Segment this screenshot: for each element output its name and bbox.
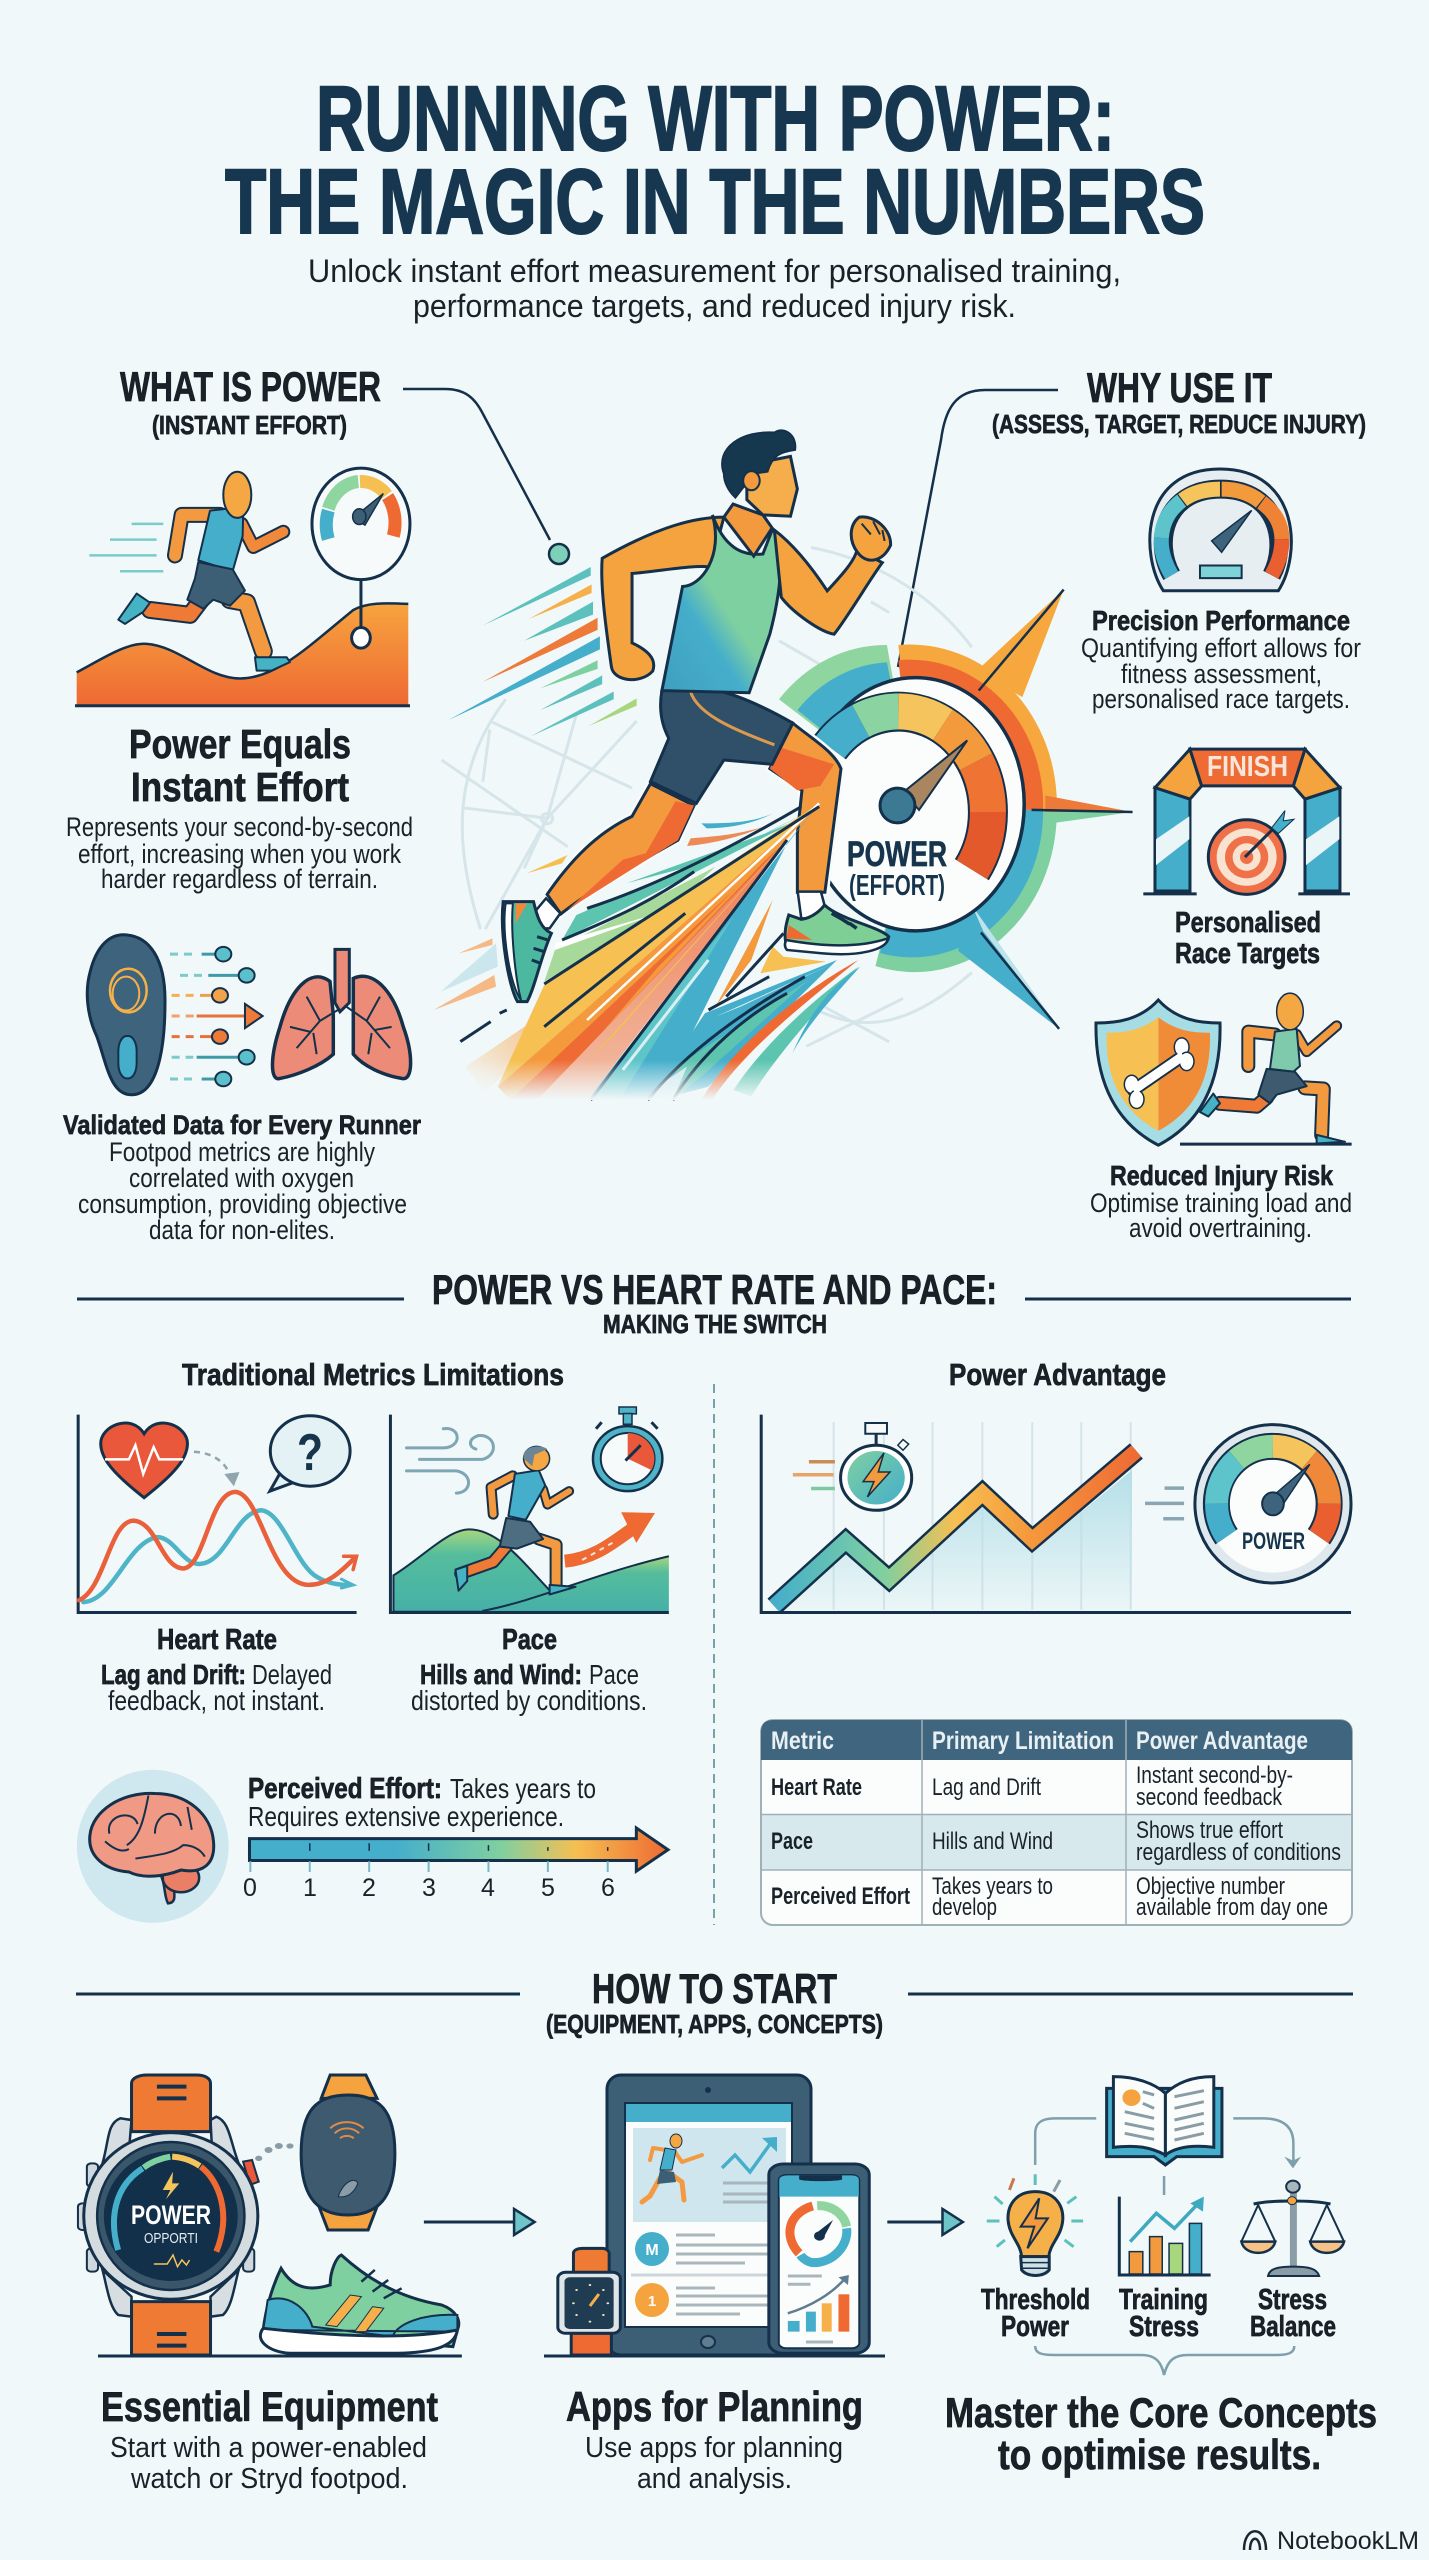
row: pace: regardless of conditions	[1136, 1839, 1341, 1866]
right column: precision gauge	[1150, 469, 1291, 591]
heading: what is power: WHAT IS POWER	[120, 363, 381, 410]
gauge dial	[807, 678, 1024, 931]
text block: precision performance: Quantifying effort allows for	[1081, 633, 1361, 663]
text: heart rate: Delayed	[252, 1659, 332, 1690]
text: perceived effort: Perceived Effort:	[248, 1773, 442, 1805]
row: pace: Shows true effort	[1136, 1817, 1283, 1844]
icon: book	[1107, 2077, 1222, 2165]
text: personalised race targets: Race Targets	[1175, 938, 1320, 970]
rear shoe	[502, 898, 560, 1002]
heading: what is power: (INSTANT EFFORT)	[152, 410, 347, 440]
question mark: ?	[297, 1424, 323, 1482]
arrow: apps to concepts	[887, 2209, 963, 2235]
wind	[406, 1429, 493, 1493]
lines	[79, 1492, 357, 1602]
illustration: footpod to lungs	[87, 935, 411, 1095]
text block: validated data: consumption, providing objective	[78, 1189, 407, 1219]
brace	[1035, 2346, 1294, 2375]
connectors	[1035, 2118, 1293, 2195]
text block: power equals instant effort: Represents your second-by-second	[66, 812, 413, 842]
concept labels: Power	[1001, 2311, 1069, 2343]
text block: reduced injury risk: Reduced Injury Risk	[1110, 1160, 1333, 1191]
column heading: traditional metrics: Traditional Metrics Limitations	[182, 1357, 564, 1392]
concept labels: Threshold	[981, 2284, 1090, 2316]
runner: front arm	[774, 517, 891, 634]
section heading: how to start: (EQUIPMENT, APPS, CONCEPTS)	[546, 2009, 883, 2039]
chart: power advantage	[761, 1415, 1351, 1612]
leader line: why use it	[898, 390, 1058, 667]
scale arrow 0-6: 6	[601, 1874, 615, 1902]
illustration: core concepts	[987, 2077, 1344, 2375]
background web	[441, 547, 972, 1046]
text block: apps for planning: and analysis.	[637, 2463, 792, 2495]
scale arrow 0-6: 2	[362, 1874, 376, 1902]
concept labels: Training	[1119, 2284, 1208, 2316]
text: pace: Pace	[589, 1659, 639, 1690]
scale arrow 0-6: 1	[303, 1874, 317, 1902]
row: perceived effort: Takes years to	[932, 1873, 1053, 1900]
dashed arrow	[194, 1452, 240, 1486]
text: perceived effort: Requires extensive experience.	[248, 1801, 564, 1832]
list lines	[631, 2183, 785, 2314]
text: heart rate: Heart Rate	[157, 1624, 277, 1656]
text: pace: Hills and Wind:	[420, 1659, 582, 1690]
speed lines	[89, 524, 163, 571]
title: RUNNING WITH POWER:	[316, 68, 1115, 170]
phone bars	[788, 2294, 849, 2332]
logo: NotebookLM: NotebookLM	[1277, 2527, 1419, 2555]
text block: precision performance: personalised race targets.	[1092, 684, 1350, 714]
section heading: power vs heart rate and pace	[77, 1266, 1351, 1339]
section heading: power vs heart rate and pace: MAKING THE SWITCH	[603, 1309, 827, 1339]
comparison table	[761, 1720, 1352, 1925]
icon: stopwatch	[593, 1407, 662, 1491]
text block: power equals instant effort	[66, 721, 413, 894]
scale arrow 0-6: 3	[422, 1874, 436, 1902]
gauge label: POWER	[847, 835, 947, 874]
row: perceived effort: Perceived Effort	[771, 1883, 910, 1910]
text block: validated data: data for non-elites.	[149, 1215, 335, 1245]
scale arrow 0-6: 0	[243, 1874, 257, 1902]
concept labels: Stress	[1258, 2284, 1327, 2316]
table header	[761, 1720, 1352, 1760]
section heading: how to start	[76, 1965, 1353, 2039]
text: pace: distorted by conditions.	[411, 1685, 647, 1716]
chart: heart rate lag	[78, 1415, 357, 1612]
icon: training stress chart	[1119, 2197, 1211, 2275]
row: pace: Pace	[771, 1828, 813, 1855]
row: heart rate: Lag and Drift	[932, 1774, 1041, 1801]
faint streaks and dashes	[434, 855, 567, 1093]
upper slivers	[544, 807, 805, 982]
runner: back arm	[602, 517, 724, 680]
row: pace	[771, 1817, 1341, 1866]
illustration: essential equipment	[78, 2075, 535, 2356]
lungs	[272, 949, 411, 1079]
icon: stopwatch	[793, 1423, 912, 1510]
text: perceived effort	[248, 1773, 596, 1832]
app icons text: 1	[648, 2293, 656, 2310]
column heading: power advantage: Power Advantage	[949, 1357, 1166, 1392]
text block: master the core concepts: to optimise results.	[998, 2431, 1321, 2478]
text block: reduced injury risk: avoid overtraining.	[1129, 1213, 1312, 1243]
text block: power equals instant effort: Power Equals	[129, 721, 351, 767]
table frame	[761, 1720, 1352, 1925]
runner: head	[722, 430, 797, 556]
app runner	[642, 2134, 702, 2202]
footpod	[301, 2075, 395, 2230]
arch label: FINISH	[1207, 751, 1288, 783]
main fan	[498, 803, 819, 1100]
title	[225, 68, 1205, 253]
text block: apps for planning: Use apps for planning	[585, 2432, 843, 2464]
icon: balance scale	[1241, 2181, 1344, 2276]
heading: what is power	[120, 363, 381, 440]
second fan	[648, 873, 860, 1100]
shaded row	[762, 1815, 1351, 1870]
icon: speech bubble	[270, 1416, 350, 1491]
subtitle	[308, 253, 1121, 324]
burst fade	[430, 1060, 950, 1100]
illustration: runner on terrain with gauge	[75, 468, 410, 706]
runner: front leg	[770, 723, 841, 892]
energy burst, lower legs and shoes	[434, 803, 889, 1100]
hill	[77, 603, 408, 705]
gauge colour ring	[779, 645, 1057, 972]
shield	[1096, 1000, 1220, 1145]
icon: finish arch with target	[1143, 749, 1350, 894]
text block: power equals instant effort: harder regardless of terrain.	[101, 864, 378, 894]
watch	[78, 2075, 259, 2355]
gauge label power: POWER	[1242, 1528, 1305, 1555]
runner: rear leg	[547, 784, 694, 914]
runner	[118, 472, 290, 671]
header labels: Metric	[771, 1727, 834, 1755]
gauge spikes	[958, 590, 1133, 1029]
text block: power equals instant effort: effort, increasing when you work	[78, 839, 401, 869]
app icons text	[645, 2242, 659, 2310]
illustration: apps tablet	[544, 2075, 885, 2356]
text block: essential equipment: Start with a power-enabled	[110, 2432, 427, 2464]
text: heart rate	[101, 1624, 332, 1716]
row: heart rate	[771, 1762, 1293, 1811]
runner: shorts	[650, 686, 793, 803]
text: personalised race targets	[1175, 907, 1321, 970]
text: pace	[411, 1624, 647, 1716]
row: heart rate: Instant second-by-	[1136, 1762, 1293, 1789]
insole	[87, 935, 165, 1095]
row: heart rate: Heart Rate	[771, 1774, 862, 1801]
scale arrow 0-6: 5	[541, 1874, 555, 1902]
dots	[255, 2143, 294, 2161]
text block: apps for planning: Apps for Planning	[566, 2383, 863, 2430]
text block: validated data: correlated with oxygen	[129, 1163, 354, 1193]
subtitle: Unlock instant effort measurement for personalised training,	[308, 253, 1121, 289]
text block: validated data: Validated Data for Every Runner	[63, 1110, 421, 1140]
chart: pace with hills and wind	[390, 1407, 669, 1612]
heading: why use it	[992, 364, 1366, 439]
heading: why use it: WHY USE IT	[1087, 364, 1272, 411]
text: pace: Pace	[502, 1624, 557, 1656]
header labels	[771, 1727, 1308, 1755]
text: perceived effort: Takes years to	[450, 1773, 596, 1804]
central illustration: runner with power gauge	[430, 430, 1133, 1100]
section heading: how to start: HOW TO START	[592, 1965, 837, 2012]
front shoe	[785, 892, 889, 954]
icon: light bulb	[987, 2174, 1083, 2275]
icon: shield with bone and runner	[1096, 993, 1352, 1145]
lugs	[102, 2117, 239, 2317]
text block: validated data: Footpod metrics are highly	[109, 1137, 375, 1167]
runner	[455, 1446, 576, 1594]
text: heart rate: feedback, not instant.	[108, 1685, 325, 1716]
row: perceived effort: available from day one	[1136, 1894, 1328, 1921]
gauge label: (EFFORT)	[849, 870, 945, 902]
text block: master the core concepts	[945, 2389, 1377, 2478]
app chart arrow	[722, 2140, 773, 2172]
phone dial	[790, 2206, 847, 2263]
leader line: what is power	[403, 389, 569, 564]
text block: reduced injury risk	[1090, 1160, 1352, 1243]
hills	[393, 1529, 669, 1612]
row: pace: Hills and Wind	[932, 1828, 1053, 1855]
text block: essential equipment	[101, 2383, 438, 2495]
text block: power equals instant effort: Instant Effort	[131, 764, 349, 810]
watch face text	[131, 2200, 211, 2247]
gauge label	[847, 835, 947, 902]
header labels: Primary Limitation	[932, 1727, 1114, 1755]
text block: essential equipment: watch or Stryd footpod.	[130, 2463, 408, 2495]
watch face text: OPPORTI	[144, 2230, 198, 2247]
row: perceived effort: Objective number	[1136, 1873, 1285, 1900]
header labels: Power Advantage	[1136, 1727, 1308, 1755]
icon: power gauge	[1145, 1425, 1351, 1583]
runner: tank top	[662, 515, 781, 693]
concept labels: Stress	[1129, 2311, 1199, 2343]
arrow: equipment to apps	[424, 2209, 535, 2235]
text block: essential equipment: Essential Equipment	[101, 2383, 438, 2430]
app icons text: M	[645, 2242, 659, 2259]
text: personalised race targets: Personalised	[1175, 907, 1321, 939]
scale arrow 0-6: 4	[481, 1874, 495, 1902]
row: perceived effort	[771, 1873, 1328, 1921]
icon: heart	[101, 1423, 187, 1498]
section heading: power vs heart rate and pace: POWER VS HEART RATE AND PACE:	[432, 1266, 997, 1313]
subtitle: performance targets, and reduced injury risk.	[413, 288, 1016, 324]
text block: precision performance: Precision Performance	[1092, 605, 1350, 636]
text block: reduced injury risk: Optimise training load and	[1090, 1188, 1352, 1218]
data lines	[170, 947, 263, 1086]
runner	[1200, 993, 1345, 1144]
text block: validated data	[63, 1110, 421, 1245]
text block: apps for planning	[566, 2383, 863, 2495]
scale arrow 0-6	[243, 1828, 668, 1902]
icon: brain	[77, 1770, 229, 1923]
text block: precision performance	[1081, 605, 1361, 714]
arrow	[565, 1512, 655, 1561]
row: perceived effort: develop	[932, 1894, 997, 1921]
watch face text: POWER	[131, 2200, 211, 2230]
illustration: small smartwatch	[558, 2248, 620, 2355]
illustration: phone	[769, 2164, 963, 2353]
gauge	[312, 468, 410, 648]
concept labels: Balance	[1250, 2311, 1336, 2343]
text block: precision performance: fitness assessment,	[1121, 659, 1322, 689]
concept labels	[981, 2284, 1336, 2343]
row: heart rate: second feedback	[1136, 1784, 1283, 1811]
shoe	[260, 2255, 459, 2353]
text: heart rate: Lag and Drift:	[101, 1659, 246, 1690]
speed streaks	[448, 567, 637, 736]
